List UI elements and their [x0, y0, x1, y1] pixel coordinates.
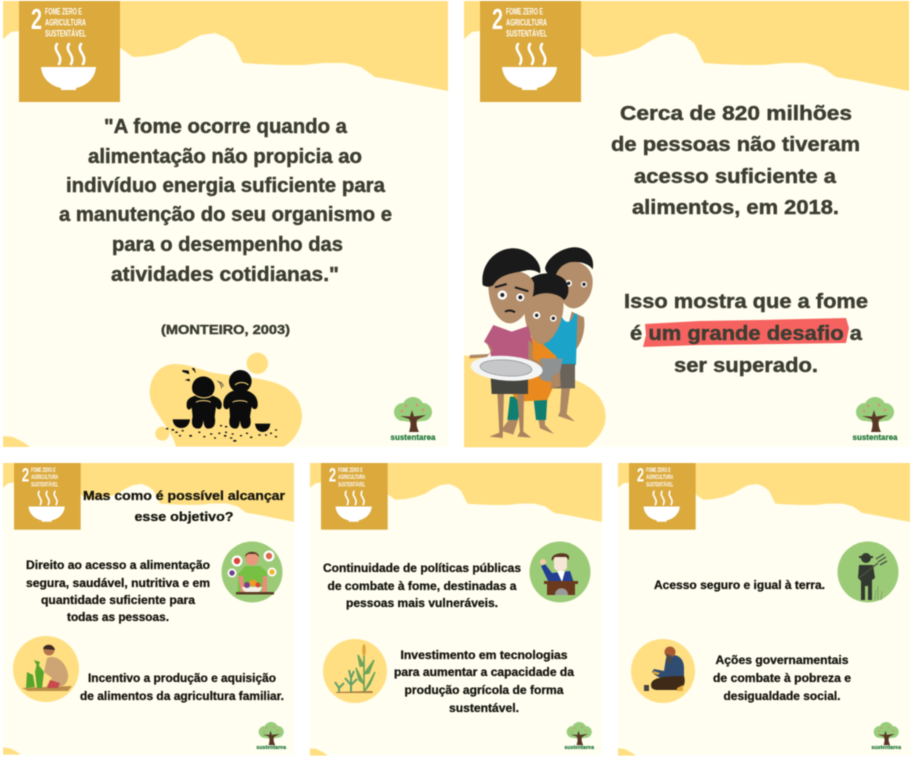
- SDG 2 badge: 2: [22, 465, 29, 486]
- SDG 2 badge: [629, 463, 696, 530]
- quote text: indivíduo energia suficiente para: [66, 175, 386, 197]
- quote text: atividades cotidianas.": [111, 264, 339, 286]
- icon: farmer with pitchfork: [838, 542, 898, 602]
- conclusion text: Isso mostra que a fome: [624, 291, 868, 313]
- text: technology investment: para aumentar a capacidade da: [394, 665, 574, 679]
- logo: sustentarea: sustentarea: [390, 432, 436, 442]
- SDG 2 badge: 2: [492, 4, 503, 36]
- conclusion text: é um grande desafio a: [630, 323, 863, 345]
- quote text: "A fome ocorre quando a: [104, 116, 348, 138]
- SDG 2 badge: [14, 463, 81, 530]
- SDG 2 badge: [19, 1, 120, 102]
- SDG 2 badge: FOME ZERO E: [646, 467, 671, 474]
- SDG 2 badge: SUSTENTÁVEL: [338, 479, 365, 488]
- text: technology investment: sustentável.: [449, 701, 519, 715]
- text: government actions: de combate à pobreza e: [713, 671, 851, 685]
- logo: sustentarea: sustentarea: [852, 432, 898, 442]
- SDG 2 badge: FOME ZERO E: [506, 6, 543, 18]
- conclusion text: [624, 291, 868, 377]
- logo: sustentarea: sustentarea: [871, 745, 902, 751]
- heading: Mas como é possível alcançar: [83, 488, 285, 503]
- logo: sustentarea: [564, 722, 595, 751]
- SDG 2 badge: FOME ZERO E: [45, 6, 82, 18]
- heading: [83, 488, 285, 524]
- text: government actions: desigualdade social.: [724, 689, 840, 703]
- SDG 2 badge: 2: [637, 465, 644, 486]
- SDG 2 badge: [480, 1, 581, 102]
- text: right to food: quantidade suficiente para: [41, 593, 195, 607]
- logo: sustentarea: [256, 722, 287, 751]
- quote text: [59, 116, 392, 286]
- panel: statistics: [464, 1, 910, 447]
- text: technology investment: Investimento em tecnologias: [400, 648, 568, 662]
- SDG 2 badge: AGRICULTURA: [338, 474, 365, 481]
- icon: person with healthy food: [222, 542, 282, 602]
- text: public policies: [323, 561, 521, 610]
- heading: esse objetivo?: [134, 509, 234, 524]
- logo: sustentarea: [852, 397, 898, 442]
- logo: sustentarea: sustentarea: [564, 745, 595, 751]
- conclusion text: ser superado.: [674, 355, 818, 377]
- text: government actions: [713, 653, 851, 703]
- icon: corn plants: [323, 639, 387, 703]
- panel: land and social equality: [618, 463, 910, 756]
- SDG 2 badge: AGRICULTURA: [45, 18, 86, 28]
- illustration: two hungry people with bowls: [150, 353, 302, 447]
- text: public policies: de combate à fome, destinadas a: [328, 579, 517, 593]
- red highlight brush: [643, 318, 849, 347]
- icon: farmer planting: [13, 636, 79, 702]
- SDG 2 badge: 2: [31, 4, 42, 36]
- logo: sustentarea: [871, 722, 902, 751]
- text: right to food: todas as pessoas.: [67, 610, 169, 624]
- statistic text: Cerca de 820 milhões: [620, 103, 852, 125]
- SDG 2 badge: 2: [329, 465, 336, 486]
- text: right to food: segura, saudável, nutritiva e em: [26, 576, 210, 590]
- SDG 2 badge: AGRICULTURA: [506, 18, 547, 28]
- SDG 2 badge: SUSTENTÁVEL: [45, 28, 86, 40]
- icon: person begging: [631, 639, 695, 703]
- panel: how to reach the goal: [3, 463, 294, 755]
- panel: quote: [3, 1, 448, 447]
- SDG 2 badge: SUSTENTÁVEL: [506, 28, 547, 40]
- text: public policies: Continuidade de políticas públicas: [323, 561, 521, 575]
- text: right to food: Direito ao acesso a alimentação: [26, 558, 210, 572]
- SDG 2 badge: AGRICULTURA: [646, 474, 673, 481]
- SDG 2 badge: [321, 463, 388, 530]
- text: family farming: de alimentos da agricultura familiar.: [80, 689, 284, 703]
- SDG 2 badge: FOME ZERO E: [338, 467, 363, 474]
- text: public policies: pessoas mais vulneráveis.: [346, 596, 498, 610]
- SDG 2 badge: AGRICULTURA: [31, 474, 58, 481]
- SDG 2 badge: FOME ZERO E: [31, 467, 56, 474]
- text: right to food: [26, 558, 210, 624]
- SDG 2 badge: SUSTENTÁVEL: [646, 479, 673, 488]
- logo: sustentarea: sustentarea: [256, 745, 287, 751]
- text: access to land: Acesso seguro e igual à terra.: [654, 578, 825, 592]
- SDG 2 badge: SUSTENTÁVEL: [31, 479, 58, 488]
- panel: public policy and technology: [310, 463, 602, 756]
- statistic text: [611, 103, 860, 219]
- text: technology investment: produção agrícola de forma: [404, 683, 564, 697]
- text: technology investment: [394, 648, 574, 715]
- statistic text: de pessoas não tiveram: [611, 134, 860, 156]
- quote text: para o desempenho das: [112, 234, 343, 256]
- citation: (MONTEIRO, 2003): [161, 322, 290, 337]
- text: family farming: Incentivo a produção e aquisição: [88, 671, 276, 685]
- statistic text: alimentos, em 2018.: [632, 197, 839, 219]
- illustration: three hungry children: [464, 247, 606, 447]
- statistic text: acesso suficiente a: [634, 166, 837, 188]
- quote text: alimentação não propicia ao: [88, 146, 362, 168]
- logo: sustentarea: [390, 397, 436, 442]
- quote text: a manutenção do seu organismo e: [59, 204, 392, 226]
- icon: politician at podium: [530, 542, 590, 602]
- text: family farming: [80, 671, 284, 703]
- text: government actions: Ações governamentais: [716, 653, 849, 667]
